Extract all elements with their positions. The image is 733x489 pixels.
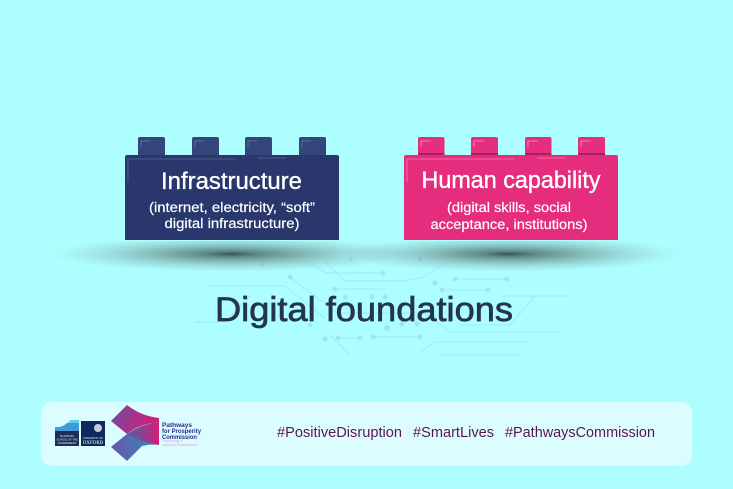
- block description: [430, 200, 588, 232]
- circuit pattern: [195, 256, 570, 355]
- logo: commission subtitle: Technology &: [162, 439, 184, 443]
- block body: [125, 155, 339, 240]
- block description: digital infrastructure): [164, 216, 300, 231]
- block heading: Infrastructure: [161, 168, 302, 195]
- hashtags: #PathwaysCommission: [505, 425, 655, 441]
- logo: Blavatnik School of Government: [55, 420, 79, 446]
- block heading: Human capability: [422, 167, 600, 194]
- logo: commission subtitle: [162, 439, 197, 447]
- block description: (digital skills, social: [447, 200, 571, 215]
- logo: University of Oxford: OXFORD: [83, 441, 104, 446]
- logo: Blavatnik School of Government: SCHOOL OF THE: [56, 438, 78, 442]
- logo: commission wordmark: Pathways: [162, 423, 193, 429]
- title: Digital foundations: [215, 291, 513, 329]
- block studs: [138, 137, 326, 157]
- logo: Pathways chevron mark: [111, 405, 159, 461]
- footer panel: [41, 402, 692, 466]
- block: human capability: [404, 137, 618, 240]
- logo: Blavatnik School of Government: GOVERNMENT: [58, 441, 77, 445]
- logo: Blavatnik School of Government: BLAVATNIK: [60, 434, 74, 438]
- hashtags: [277, 425, 655, 441]
- block description: acceptance, institutions): [430, 217, 588, 232]
- logo: University of Oxford: UNIVERSITY OF: [83, 436, 103, 440]
- hashtags: #PositiveDisruption: [277, 425, 402, 441]
- logo: commission subtitle: Inclusive Development: [162, 443, 197, 447]
- logo: commission wordmark: for Prosperity: [162, 429, 202, 435]
- block: infrastructure: [125, 137, 339, 240]
- shadow band under the blocks: [70, 241, 664, 270]
- logo: University of Oxford: [81, 421, 105, 446]
- block description: (internet, electricity, “soft”: [149, 200, 315, 215]
- logo: commission wordmark: Commission: [162, 435, 197, 441]
- block body: [404, 155, 618, 240]
- hashtags: #SmartLives: [413, 425, 494, 441]
- block description: [149, 200, 315, 231]
- block studs: [418, 137, 605, 157]
- logo: commission wordmark: [162, 423, 202, 441]
